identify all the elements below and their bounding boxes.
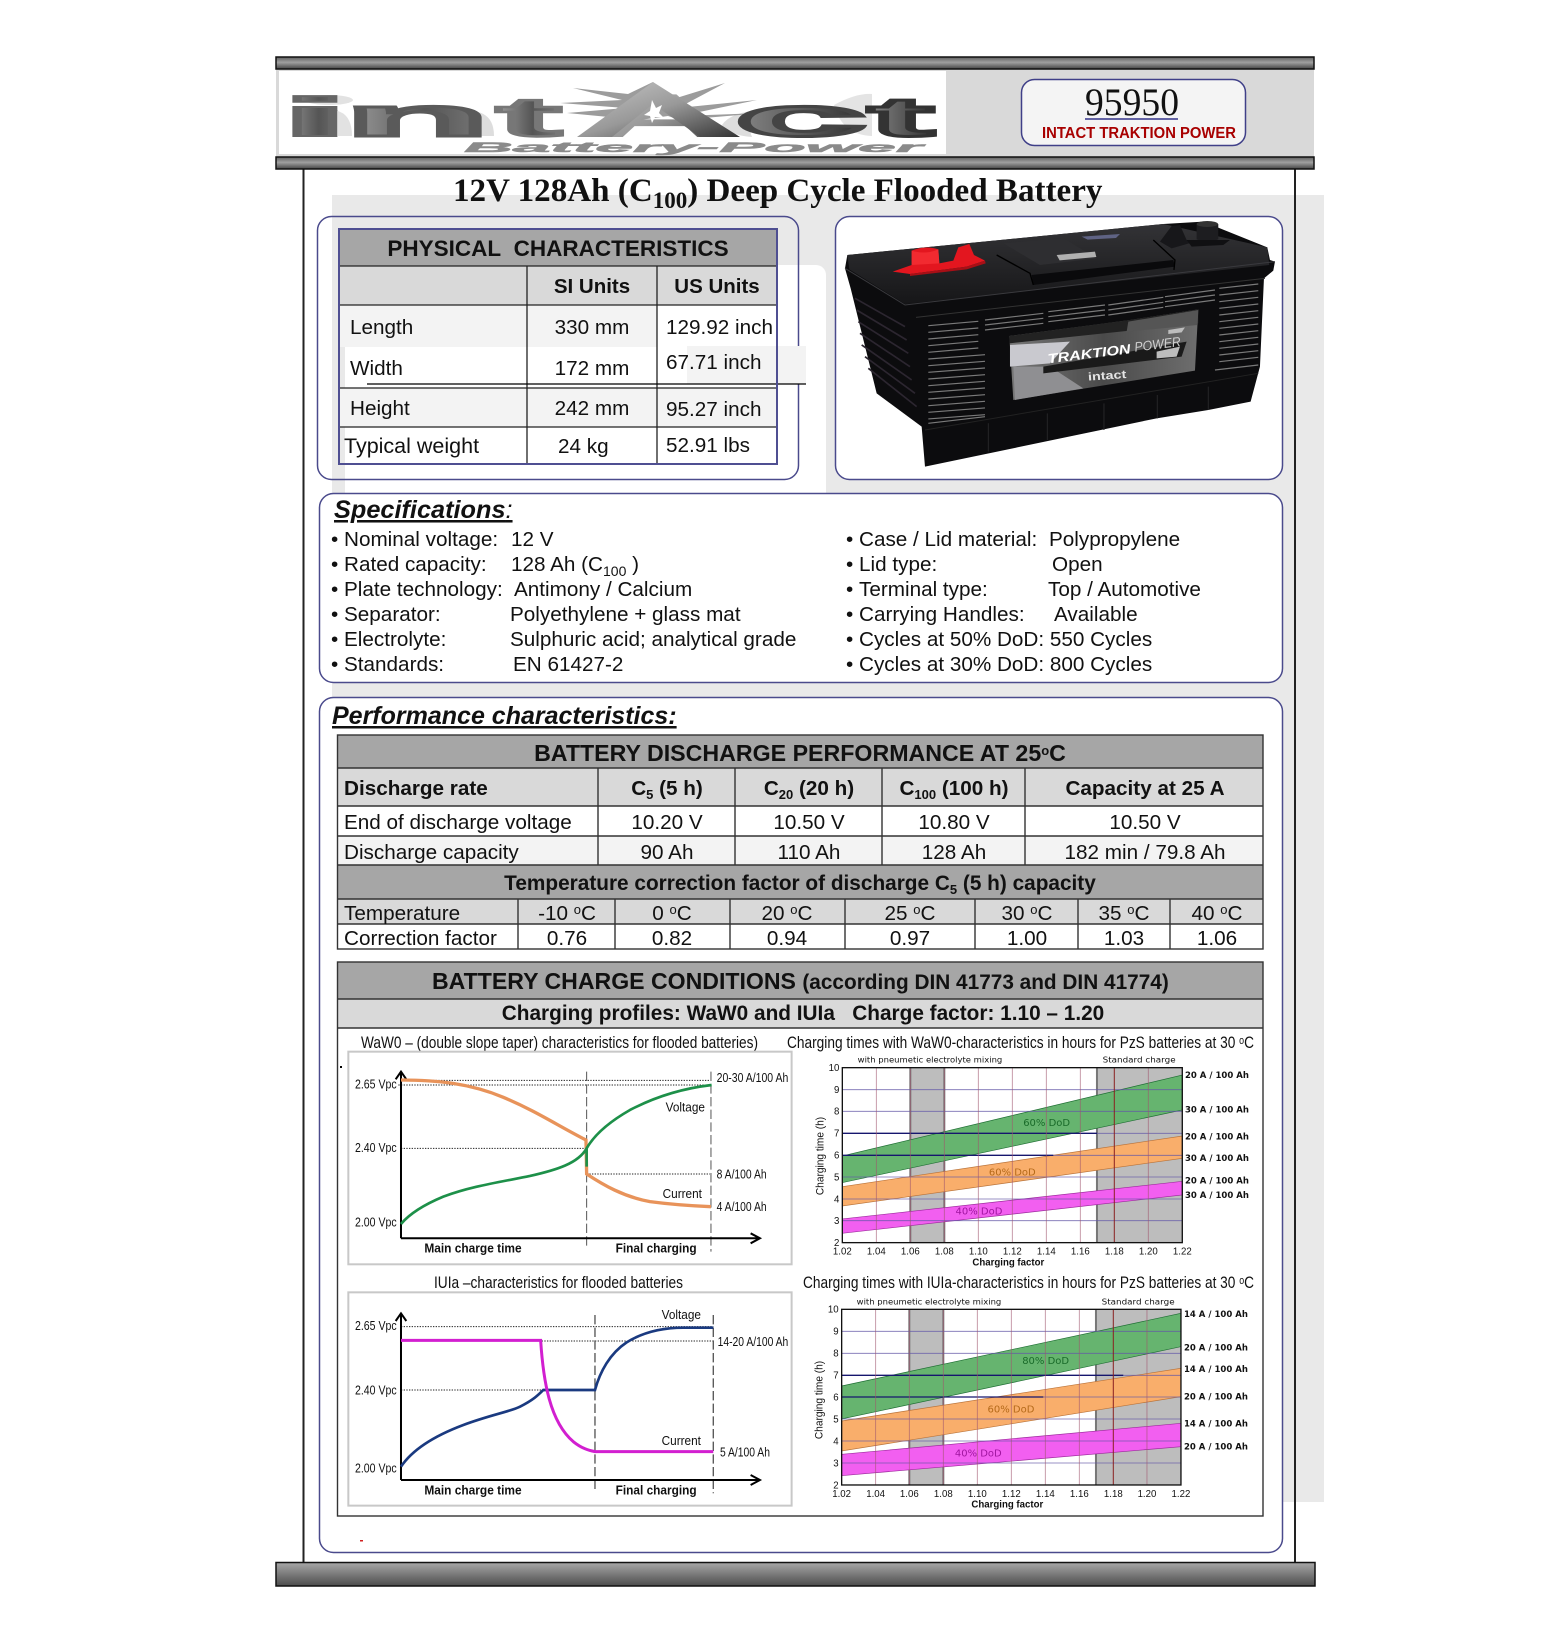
specifications right column: Available (1054, 603, 1138, 626)
chart: IUIa charging times: Charging time (h) (814, 1361, 826, 1439)
x axis ticks (833, 1247, 1192, 1258)
specifications left column: Separator: (344, 603, 441, 626)
chart: WaW0 voltage and current curves: Main charge time (424, 1241, 522, 1256)
chart: IUIa charging times: Standard charge (1102, 1298, 1175, 1307)
x axis ticks: 1.04 (867, 1247, 886, 1258)
physical table values: Length (350, 316, 413, 339)
battery base panels (988, 387, 1208, 452)
temperature row: o (913, 902, 921, 917)
x axis ticks: 1.14 (1036, 1489, 1055, 1500)
specifications left column: EN 61427-2 (513, 653, 623, 676)
physical table values: 330 mm (555, 316, 629, 339)
temperature row: o (1030, 902, 1038, 917)
grey charge zones (909, 1309, 943, 1485)
band labels: 60% DoD (1023, 1118, 1070, 1129)
model number badge (1022, 80, 1246, 146)
chart titles top: WaW0 – (double slope taper) characteristics for flooded batteries) (361, 1033, 758, 1052)
page background panel (332, 195, 1324, 1502)
correction factor row: Correction factor (344, 927, 497, 950)
specifications left column: • (331, 653, 338, 676)
y axis ticks: 8 (834, 1107, 839, 1118)
panel: battery photo (836, 216, 1282, 480)
specifications left column: Standards: (344, 653, 444, 676)
rate labels: 30 A / 100 Ah (1185, 1154, 1249, 1164)
correction factor row: 0.94 (767, 927, 807, 950)
voltage curve (401, 1085, 712, 1224)
y axis ticks: 3 (834, 1216, 839, 1227)
chart: IUIa charging times (814, 1298, 1248, 1511)
temperature row (344, 902, 1243, 925)
title: 100 (653, 188, 687, 213)
grid (842, 1331, 1181, 1463)
x axis ticks: 1.12 (1002, 1489, 1021, 1500)
specifications left column (331, 528, 796, 676)
page side rails (304, 165, 1295, 1565)
chart: WaW0 charging times: Charging time (h) (814, 1117, 826, 1195)
chart titles bottom: IUIa –characteristics for flooded batteries (434, 1273, 683, 1292)
icon: battery illustration (845, 221, 1275, 467)
specifications left column: Plate technology: (344, 578, 503, 601)
chart: WaW0 voltage and current curves (348, 1052, 792, 1264)
physical table values: 24 kg (558, 435, 609, 458)
x axis ticks: 1.04 (866, 1489, 886, 1500)
axis labels: 14-20 A/100 Ah (718, 1335, 788, 1349)
logo: intAct Battery-Power: t (868, 86, 934, 148)
y axis ticks: 6 (833, 1392, 839, 1403)
physical table values: Height (350, 397, 410, 420)
icon: battery illustration: intact (1088, 369, 1127, 384)
band labels: 80% DoD (1022, 1356, 1069, 1367)
icon: battery illustration: TRAKTION (1047, 341, 1132, 366)
chart: WaW0 charging times: 60% DoD (989, 1167, 1036, 1178)
zone captions: with pneumetic electrolyte mixing (857, 1298, 1001, 1307)
discharge rate row: 100 (914, 787, 936, 802)
charge conditions table: C (1244, 1273, 1254, 1292)
icon: battery illustration: POWER (1134, 334, 1182, 355)
specifications right column: • (846, 553, 853, 576)
specifications left column: Antimony / Calcium (514, 578, 692, 601)
green DoD band (842, 1075, 1182, 1183)
chart: IUIa voltage and current curves: Final charging (616, 1482, 697, 1497)
rate labels: 20 A / 100 Ah (1184, 1343, 1248, 1353)
x axis ticks: 1.22 (1173, 1247, 1192, 1258)
rate labels (1185, 1071, 1249, 1201)
x axis ticks: 1.18 (1105, 1247, 1124, 1258)
charging profiles line: Charging profiles: WaW0 and IUIa Charge factor: 1.10 – 1.20 (502, 1002, 1104, 1025)
physical table values: Width (350, 357, 403, 380)
axis labels: 2.65 Vpc (355, 1319, 397, 1333)
physical table values: 52.91 lbs (666, 434, 750, 457)
axis labels: 2.40 Vpc (355, 1141, 397, 1155)
panel: specifications (320, 494, 1282, 682)
charge conditions table: Charging times with WaW0-characteristics in hours for PzS batteries at 30 (787, 1033, 1344, 1052)
x axis ticks: 1.18 (1104, 1489, 1123, 1500)
temperature row: C (581, 902, 596, 925)
axis labels (355, 1071, 788, 1230)
logo: intAct Battery-Power: i (279, 86, 351, 148)
orange DoD band (842, 1136, 1182, 1206)
icon: black terminals (1160, 221, 1230, 248)
physical table values: 95.27 inch (666, 398, 761, 421)
axis labels: 20-30 A/100 Ah (717, 1071, 788, 1085)
specifications right column: Polypropylene (1049, 528, 1180, 551)
specifications right column: • (846, 603, 853, 626)
temperature row: 25 (885, 902, 908, 925)
specifications left column: • (331, 628, 338, 651)
specifications left column: Sulphuric acid; analytical grade (510, 628, 796, 651)
physical table lines (339, 266, 806, 464)
specifications left column: 12 V (511, 528, 554, 551)
temperature correction heading: Temperature correction factor of discharge C (504, 872, 950, 895)
temperature row: 30 (1002, 902, 1025, 925)
x axis ticks (832, 1489, 1190, 1500)
correction factor row: 1.00 (1007, 927, 1047, 950)
physical table values: 67.71 inch (666, 351, 761, 374)
axis labels: 2.65 Vpc (355, 1077, 397, 1091)
temperature row: 35 (1099, 902, 1122, 925)
specifications right column: Terminal type: (859, 578, 988, 601)
specifications left column: • (331, 553, 338, 576)
physical table values: 172 mm (555, 357, 629, 380)
y axis ticks: 2 (834, 1238, 839, 1249)
discharge rate row: C (631, 777, 646, 800)
logo: intAct Battery-Power (279, 71, 946, 155)
lower header bar (276, 157, 1314, 169)
specifications left column: Electrolyte: (344, 628, 446, 651)
axis labels: Voltage (666, 1101, 705, 1115)
rate labels: 14 A / 100 Ah (1184, 1310, 1248, 1320)
logo: intAct Battery-Power: t (496, 86, 562, 148)
temperature row: C (677, 902, 692, 925)
specifications right column: Cycles at 30% DoD: 800 Cycles (859, 653, 1152, 676)
x axis ticks: 1.20 (1138, 1489, 1156, 1500)
axes (396, 1313, 760, 1485)
rate labels: 14 A / 100 Ah (1184, 1365, 1248, 1375)
specifications left column: • (331, 528, 338, 551)
rate labels: 20 A / 100 Ah (1185, 1071, 1249, 1081)
temperature row: C (1228, 902, 1243, 925)
logo: intAct Battery-Power: A (590, 82, 730, 151)
panel: physical characteristics (318, 216, 806, 480)
discharge voltage and capacity rows: 10.50 V (1109, 811, 1181, 834)
40% DoD band (842, 1423, 1181, 1476)
axis labels: 2.40 Vpc (355, 1383, 397, 1397)
specifications right column: Case / Lid material: (859, 528, 1037, 551)
discharge table heading: BATTERY DISCHARGE PERFORMANCE AT 25 (534, 740, 1041, 766)
y axis ticks: 2 (833, 1480, 839, 1491)
rate labels: 30 A / 100 Ah (1185, 1106, 1249, 1116)
rate labels (1184, 1310, 1248, 1453)
logo: intAct Battery-Power: c (735, 86, 867, 148)
x axis ticks: 1.16 (1070, 1489, 1089, 1500)
specifications right column (846, 528, 1201, 676)
y axis ticks: 6 (834, 1151, 839, 1162)
x axis ticks: 1.10 (969, 1247, 988, 1258)
grid (842, 1090, 1182, 1221)
chart: WaW0 charging times: 40% DoD (956, 1207, 1003, 1218)
discharge voltage and capacity rows: 110 Ah (778, 841, 840, 864)
x axis ticks: 1.08 (935, 1247, 954, 1258)
physical table heading: PHYSICAL CHARACTERISTICS (387, 236, 729, 261)
discharge table heading: o (1041, 743, 1049, 758)
discharge voltage and capacity rows (344, 811, 1226, 864)
correction factor row: 0.97 (890, 927, 930, 950)
specifications left column: Nominal voltage: (344, 528, 498, 551)
specifications right column: • (846, 578, 853, 601)
discharge table heading: C (1049, 740, 1066, 766)
temperature row: Temperature (344, 902, 460, 925)
chart: WaW0 voltage and current curves: Final charging (616, 1241, 697, 1256)
battery label (1009, 309, 1198, 400)
discharge voltage and capacity rows: 10.20 V (631, 811, 703, 834)
discharge rate row: Capacity at 25 A (1065, 777, 1225, 800)
axis labels: Current (662, 1434, 701, 1448)
axis labels: 2.00 Vpc (355, 1461, 397, 1475)
x axis ticks: 1.20 (1139, 1247, 1158, 1258)
logo: intAct Battery-Power: Battery-Power (464, 139, 929, 155)
chart: IUIa charging times: 60% DoD (988, 1405, 1035, 1416)
correction factor row: 1.03 (1104, 927, 1144, 950)
discharge voltage and capacity rows: 182 min / 79.8 Ah (1064, 841, 1226, 864)
temperature row: o (1220, 902, 1228, 917)
rate labels: 30 A / 100 Ah (1185, 1191, 1249, 1201)
y axis ticks: 4 (834, 1194, 840, 1205)
charge conditions table: C (1244, 1033, 1254, 1052)
specifications left column: 100 (603, 563, 627, 579)
model number badge: 95950 (1085, 81, 1179, 124)
x axis ticks: 1.06 (900, 1489, 919, 1500)
x axis ticks: 1.08 (934, 1489, 953, 1500)
current curve (401, 1340, 713, 1452)
chart: WaW0 charging times (814, 1056, 1249, 1268)
discharge voltage and capacity rows: 90 Ah (641, 841, 693, 864)
temperature row: 20 (762, 902, 785, 925)
correction factor row: 1.06 (1197, 927, 1237, 950)
specifications left column: Polyethylene + glass mat (510, 603, 741, 626)
charge conditions table: o (1239, 1275, 1244, 1287)
current curve (401, 1080, 711, 1207)
logo star burst (560, 82, 763, 120)
correction factor row: 0.82 (652, 927, 692, 950)
x axis ticks: 1.10 (968, 1489, 987, 1500)
temperature row: 40 (1192, 902, 1215, 925)
discharge voltage and capacity rows: 10.50 V (773, 811, 845, 834)
battery lid sticker (1003, 238, 1097, 265)
header band (276, 57, 1314, 169)
logo A frame (577, 82, 740, 137)
y axis ticks (829, 1063, 840, 1249)
axis labels: 4 A/100 Ah (717, 1200, 767, 1214)
specifications right column: • (846, 528, 853, 551)
chart: IUIa voltage and current curves: Main charge time (424, 1482, 522, 1497)
60% DoD band (842, 1368, 1181, 1451)
chart: WaW0 charging times: Standard charge (1103, 1056, 1176, 1065)
discharge rate row: (5 h) (653, 777, 703, 800)
performance heading: Performance characteristics: (332, 702, 677, 730)
specifications left column: • (331, 603, 338, 626)
magenta DoD band (842, 1181, 1182, 1233)
specifications right column: Top / Automotive (1048, 578, 1201, 601)
zone captions: with pneumetic electrolyte mixing (858, 1056, 1002, 1065)
charge conditions table: Charging times with IUIa-characteristics in hours for PzS batteries at 30 (803, 1273, 1341, 1292)
temperature row: C (798, 902, 813, 925)
discharge performance table (337, 735, 1263, 950)
temperature row: o (790, 902, 798, 917)
physical table values (344, 316, 773, 458)
x axis ticks: 1.06 (901, 1247, 920, 1258)
discharge voltage and capacity rows: End of discharge voltage (344, 811, 572, 834)
physical table units: US Units (674, 275, 760, 298)
correction factor row (344, 927, 1237, 950)
rate labels: 20 A / 100 Ah (1185, 1177, 1249, 1187)
chart: IUIa charging times: Charging factor (971, 1500, 1043, 1511)
y axis ticks: 7 (834, 1129, 839, 1140)
specifications right column: • (846, 628, 853, 651)
y axis ticks: 7 (833, 1371, 839, 1382)
specifications right column: Carrying Handles: (859, 603, 1025, 626)
temperature row: o (670, 902, 677, 917)
y axis ticks: 10 (828, 1305, 839, 1316)
y axis ticks: 4 (833, 1436, 839, 1447)
temperature correction heading: 5 (950, 882, 957, 897)
physical table units (554, 275, 760, 298)
specifications right column: Open (1052, 553, 1103, 576)
y axis ticks: 8 (833, 1349, 839, 1360)
specifications left column: 128 Ah (C (511, 553, 603, 576)
title: ) Deep Cycle Flooded Battery (687, 173, 1103, 209)
battery front ribs (928, 284, 1258, 423)
specifications left column: Rated capacity: (344, 553, 487, 576)
y axis ticks: 5 (833, 1414, 839, 1425)
x axis ticks: 1.14 (1037, 1247, 1056, 1258)
correction factor row: 0.76 (547, 927, 587, 950)
x axis ticks: 1.22 (1172, 1489, 1190, 1500)
axis labels: 2.00 Vpc (355, 1216, 397, 1230)
charge table heading: BATTERY CHARGE CONDITIONS (according DIN 41773 and DIN 41774) (432, 968, 1169, 994)
title: 12V 128Ah (C (453, 173, 653, 209)
x axis ticks: 1.02 (833, 1247, 852, 1258)
temperature row: -10 (538, 902, 568, 925)
physical table fills (339, 229, 806, 464)
temperature row: C (1135, 902, 1150, 925)
axis labels: Current (663, 1187, 702, 1201)
battery side ribs (855, 298, 917, 407)
specifications right column: Lid type: (859, 553, 937, 576)
rate labels: 14 A / 100 Ah (1184, 1419, 1248, 1429)
axis labels: Voltage (662, 1308, 701, 1322)
x axis ticks: 1.16 (1071, 1247, 1090, 1258)
temperature row: o (574, 902, 581, 917)
y axis ticks (828, 1305, 839, 1491)
discharge rate row: Discharge rate (344, 777, 488, 800)
axis labels: 5 A/100 Ah (720, 1446, 770, 1460)
chart: IUIa charging times: 40% DoD (955, 1449, 1002, 1460)
y axis ticks: 3 (833, 1458, 839, 1469)
rate labels: 20 A / 100 Ah (1184, 1443, 1248, 1453)
chart: WaW0 charging times: Charging factor (972, 1257, 1044, 1268)
specifications left column: • (331, 578, 338, 601)
top bar (276, 57, 1314, 69)
discharge rate row: 5 (646, 787, 653, 802)
discharge rate row: (20 h) (793, 777, 854, 800)
discharge rate row: C (764, 777, 779, 800)
voltage curve (401, 1328, 713, 1467)
axis labels: 8 A/100 Ah (717, 1168, 767, 1182)
y axis ticks: 9 (834, 1085, 839, 1096)
physical table values: Typical weight (344, 434, 479, 458)
axes (396, 1072, 760, 1243)
logo: intAct Battery-Power: n (344, 86, 490, 148)
y axis ticks: 5 (834, 1172, 839, 1183)
physical table units: SI Units (554, 275, 630, 298)
grey charge zones (910, 1068, 944, 1243)
discharge rate row: 20 (779, 787, 793, 802)
specifications heading: Specifications: (334, 496, 513, 524)
80% DoD band (842, 1313, 1181, 1419)
bottom bar (276, 1562, 1315, 1586)
temperature row: C (921, 902, 936, 925)
icon: red terminals (893, 244, 986, 276)
temperature row: C (1038, 902, 1053, 925)
charge conditions table: o (1239, 1035, 1244, 1047)
specifications right column: Cycles at 50% DoD: 550 Cycles (859, 628, 1152, 651)
temperature correction heading: (5 h) capacity (957, 872, 1096, 895)
x axis ticks: 1.12 (1003, 1247, 1022, 1258)
discharge rate row: (100 h) (936, 777, 1009, 800)
temperature row: o (1127, 902, 1135, 917)
physical table values: 129.92 inch (666, 316, 773, 339)
axis labels (355, 1308, 788, 1475)
discharge rate row: C (899, 777, 914, 800)
discharge voltage and capacity rows: Discharge capacity (344, 841, 519, 864)
y axis ticks: 9 (833, 1327, 839, 1338)
discharge voltage and capacity rows: 128 Ah (922, 841, 986, 864)
model number badge: INTACT TRAKTION POWER (1042, 125, 1236, 142)
specifications left column: ) (626, 553, 639, 576)
discharge voltage and capacity rows: 10.80 V (918, 811, 990, 834)
specifications right column: • (846, 653, 853, 676)
charge conditions table (337, 962, 1263, 1516)
panel: performance characteristics (320, 698, 1282, 1552)
chart: IUIa voltage and current curves (348, 1292, 792, 1506)
y axis ticks: 10 (829, 1063, 839, 1074)
rate labels: 20 A / 100 Ah (1184, 1392, 1248, 1402)
rate labels: 20 A / 100 Ah (1185, 1132, 1249, 1142)
temperature row: 0 (652, 902, 664, 925)
x axis ticks: 1.02 (832, 1489, 851, 1500)
discharge rate row (344, 777, 1225, 802)
physical table values: 242 mm (555, 397, 629, 420)
